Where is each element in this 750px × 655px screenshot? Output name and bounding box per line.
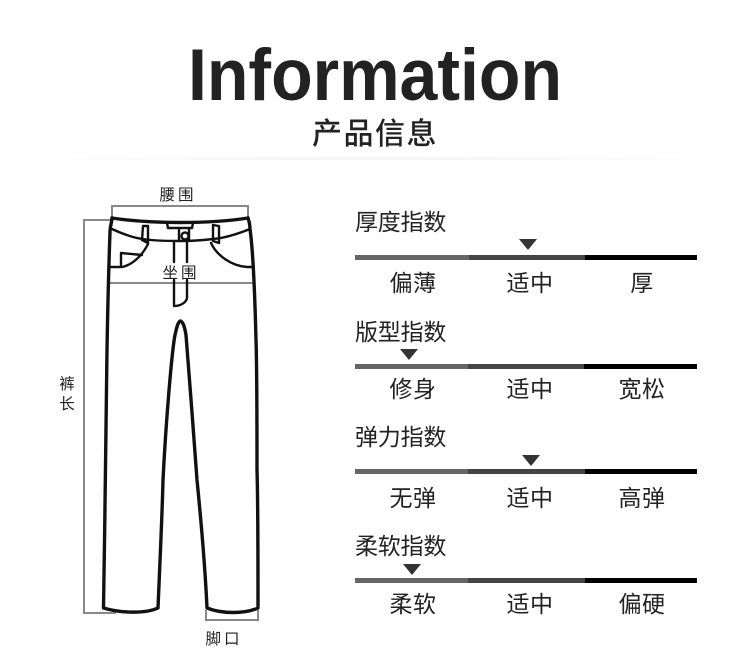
label: hem: 脚口	[205, 630, 243, 648]
scale labels: 适中	[506, 270, 554, 296]
scale labels: 厚	[630, 270, 654, 296]
label: length: 裤	[59, 375, 75, 393]
marker	[519, 239, 537, 250]
measure line: waist	[112, 206, 248, 219]
scale labels	[390, 591, 666, 617]
marker	[403, 564, 421, 575]
marker	[400, 349, 418, 360]
panel: fit index	[355, 319, 697, 402]
subtitle: product information: 产品信息	[312, 118, 438, 151]
scale labels: 适中	[506, 376, 554, 402]
label: length: 长	[59, 395, 75, 413]
panel: stretch index	[355, 424, 697, 511]
heading: 弹力指数	[355, 424, 446, 450]
scale labels: 偏薄	[390, 270, 436, 296]
scale bar	[355, 469, 697, 474]
scale bar	[355, 578, 697, 583]
title: Information: Information	[188, 35, 562, 116]
label: waist: 腰围	[159, 186, 197, 204]
scale labels: 适中	[506, 591, 554, 617]
icon: trousers outline	[104, 218, 258, 612]
scale labels: 柔软	[390, 591, 436, 617]
label: length	[59, 375, 75, 413]
panel: trousers size diagram	[59, 186, 258, 648]
scale labels	[390, 485, 666, 511]
heading: 厚度指数	[355, 209, 446, 235]
scale labels: 适中	[506, 485, 554, 511]
heading: 版型指数	[355, 319, 446, 345]
panel: softness index	[355, 533, 697, 617]
scale labels	[390, 376, 666, 402]
measure line: hem	[206, 610, 258, 620]
measure line: hip	[108, 282, 255, 284]
scale labels	[390, 270, 654, 296]
label: hip: 坐围	[162, 264, 200, 282]
heading: 柔软指数	[355, 533, 446, 559]
measure line: length	[84, 220, 116, 613]
scale bar	[355, 364, 697, 369]
panel: thickness index	[355, 209, 697, 296]
scale labels: 无弹	[390, 485, 436, 511]
scale labels: 宽松	[618, 376, 666, 402]
marker	[522, 455, 540, 466]
scale labels: 偏硬	[618, 591, 666, 617]
scale labels: 高弹	[618, 485, 666, 511]
scale bar	[355, 255, 697, 260]
scale labels: 修身	[390, 376, 436, 402]
